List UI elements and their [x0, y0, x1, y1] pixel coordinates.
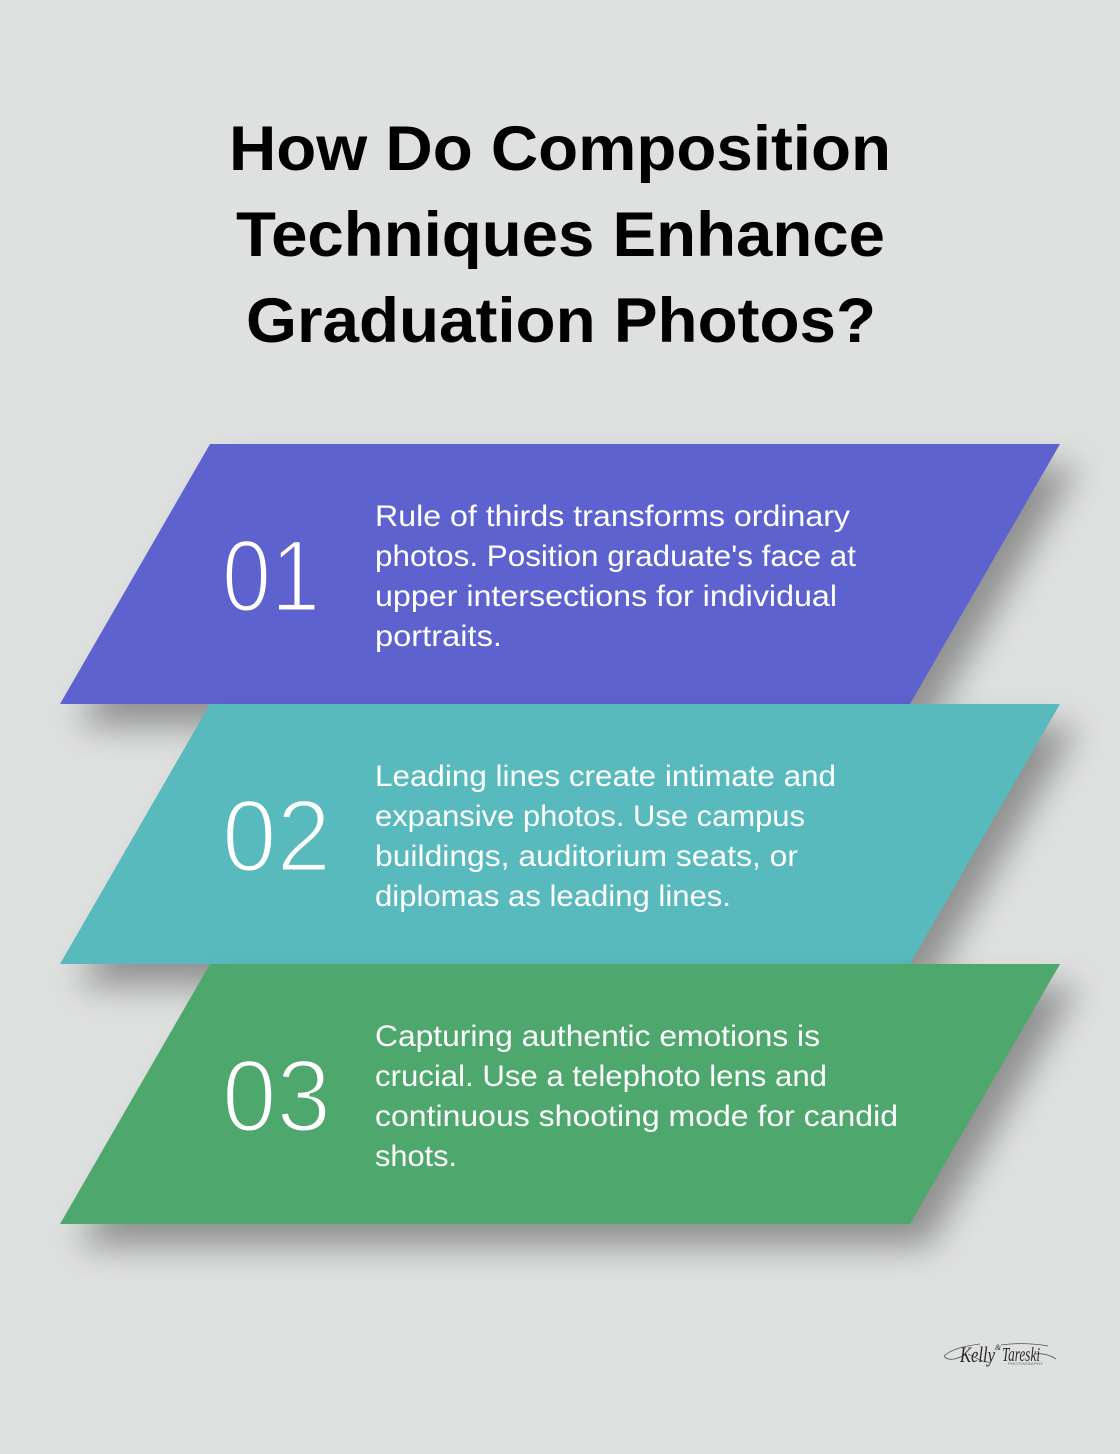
number 02: 02 — [222, 779, 331, 893]
logo: signature: Tareski — [1002, 1344, 1040, 1366]
text: rule of thirds — [375, 500, 857, 653]
text: authentic emotions: continuous shooting mode for candid — [375, 1100, 898, 1133]
text: rule of thirds: upper intersections for individual — [375, 580, 837, 613]
number 01: 01 — [222, 519, 320, 633]
logo: signature: Kelly — [959, 1342, 995, 1367]
text: authentic emotions: Capturing authentic emotions is — [375, 1020, 820, 1053]
panel: step 01 — [60, 444, 1078, 726]
title: Techniques Enhance — [236, 200, 885, 270]
logo: signature — [944, 1342, 1056, 1367]
text: rule of thirds: photos. Position graduate's face at — [375, 540, 857, 573]
title: Graduation Photos? — [246, 286, 876, 356]
text: authentic emotions: crucial. Use a telephoto lens and — [375, 1060, 827, 1093]
logo: signature: & — [995, 1343, 1002, 1352]
panel: step 03 — [60, 964, 1078, 1246]
panel: step 02 — [60, 704, 1078, 986]
title — [229, 114, 891, 356]
text: rule of thirds: portraits. — [375, 620, 502, 653]
text: leading lines: expansive photos. Use campus — [375, 800, 805, 833]
text: leading lines — [375, 760, 836, 913]
text: authentic emotions — [375, 1020, 898, 1173]
title: How Do Composition — [229, 114, 891, 184]
text: leading lines: diplomas as leading lines. — [375, 880, 731, 913]
number 03: 03 — [222, 1039, 331, 1153]
text: leading lines: Leading lines create intimate and — [375, 760, 836, 793]
text: authentic emotions: shots. — [375, 1140, 457, 1173]
text: leading lines: buildings, auditorium seats, or — [375, 840, 798, 873]
logo: signature: PHOTOGRAPHY — [1008, 1362, 1044, 1366]
text: rule of thirds: Rule of thirds transforms ordinary — [375, 500, 850, 533]
